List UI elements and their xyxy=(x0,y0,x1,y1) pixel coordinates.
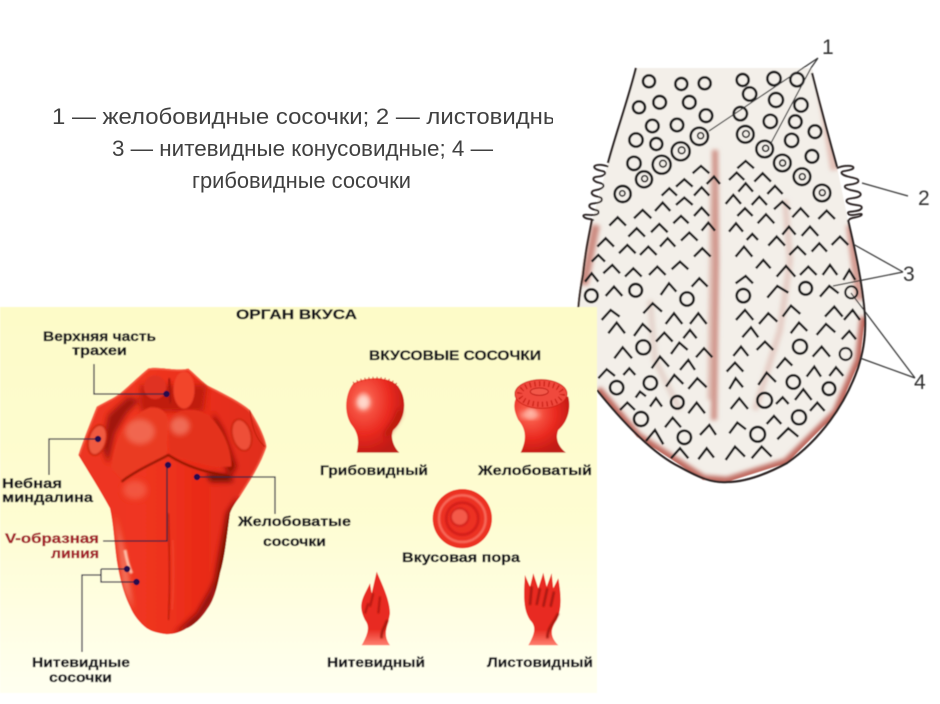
callout: vallate papillae: сосочки xyxy=(263,533,326,549)
left highlight xyxy=(125,550,132,573)
callout: palatine tonsil: миндалина xyxy=(2,489,93,505)
callout: vallate papillae: Желобоватые xyxy=(237,513,351,529)
deep pits around lobes xyxy=(102,385,237,634)
callout: palatine tonsil: Небная xyxy=(2,475,62,491)
tongue body xyxy=(577,68,865,482)
heading text xyxy=(52,104,580,193)
median groove xyxy=(168,513,170,620)
callout: V-shaped line: линия xyxy=(51,545,99,561)
upper lobes xyxy=(112,407,168,480)
upper pharynx bumps xyxy=(144,375,166,399)
callout: upper trachea: Верхняя часть xyxy=(43,328,156,344)
callout: palatine tonsil xyxy=(2,436,101,505)
heading: taste papillae: ВКУСОВЫЕ СОСОЧКИ xyxy=(369,347,541,363)
label 2: 2 xyxy=(918,187,930,210)
icon: fungiform papilla xyxy=(346,378,404,453)
foliate papillae fringe xyxy=(583,165,862,221)
filiform chevrons (upper) xyxy=(592,161,848,262)
small ring papillae (upper) xyxy=(627,72,821,170)
leader lines xyxy=(709,58,915,378)
label: filiform: Нитевидный xyxy=(327,654,425,670)
label 4: 4 xyxy=(914,371,926,394)
label: foliate: Листовидный xyxy=(487,654,593,670)
panel background xyxy=(0,307,597,693)
label 3: 3 xyxy=(903,263,915,286)
callout: V-shaped line xyxy=(5,462,171,561)
heading text: 1 — желобовидные сосочки; 2 — листовидные; xyxy=(52,104,580,129)
vallate papillae double rings xyxy=(615,126,830,202)
outer rim shading xyxy=(78,368,267,497)
callout: V-shaped line: V-образная xyxy=(5,530,99,546)
icon: foliate papilla xyxy=(524,573,561,645)
tonsils xyxy=(86,424,108,456)
label: vallate: Желобоватый xyxy=(477,462,592,478)
label 1: 1 xyxy=(822,36,834,59)
callout: filiform papillae: сосочки xyxy=(49,669,112,685)
callout: filiform papillae xyxy=(32,566,140,685)
heading text: 3 — нитевидные конусовидные; 4 — xyxy=(112,136,493,161)
V groove xyxy=(122,455,230,482)
icon: vallate papilla xyxy=(514,380,569,453)
callout: filiform papillae: Нитевидные xyxy=(32,654,130,670)
ring papillae (lower) xyxy=(585,282,857,444)
icon: taste pore xyxy=(433,489,492,548)
callout: upper trachea xyxy=(43,328,170,397)
label: taste pore: Вкусовая пора xyxy=(402,549,520,565)
panel: organ of taste xyxy=(0,306,597,693)
panel title: ОРГАН ВКУСА xyxy=(236,306,357,322)
red tongue illustration xyxy=(78,368,267,634)
tongue diagram: schematic of papillae xyxy=(577,36,930,482)
callout: upper trachea: трахеи xyxy=(72,342,127,358)
icon: filiform papilla xyxy=(361,572,390,645)
heading text: грибовидные сосочки xyxy=(192,168,411,193)
label: fungiform: Грибовидный xyxy=(320,462,428,478)
filiform chevrons (lower) xyxy=(585,260,860,460)
callout: vallate papillae xyxy=(194,474,351,549)
